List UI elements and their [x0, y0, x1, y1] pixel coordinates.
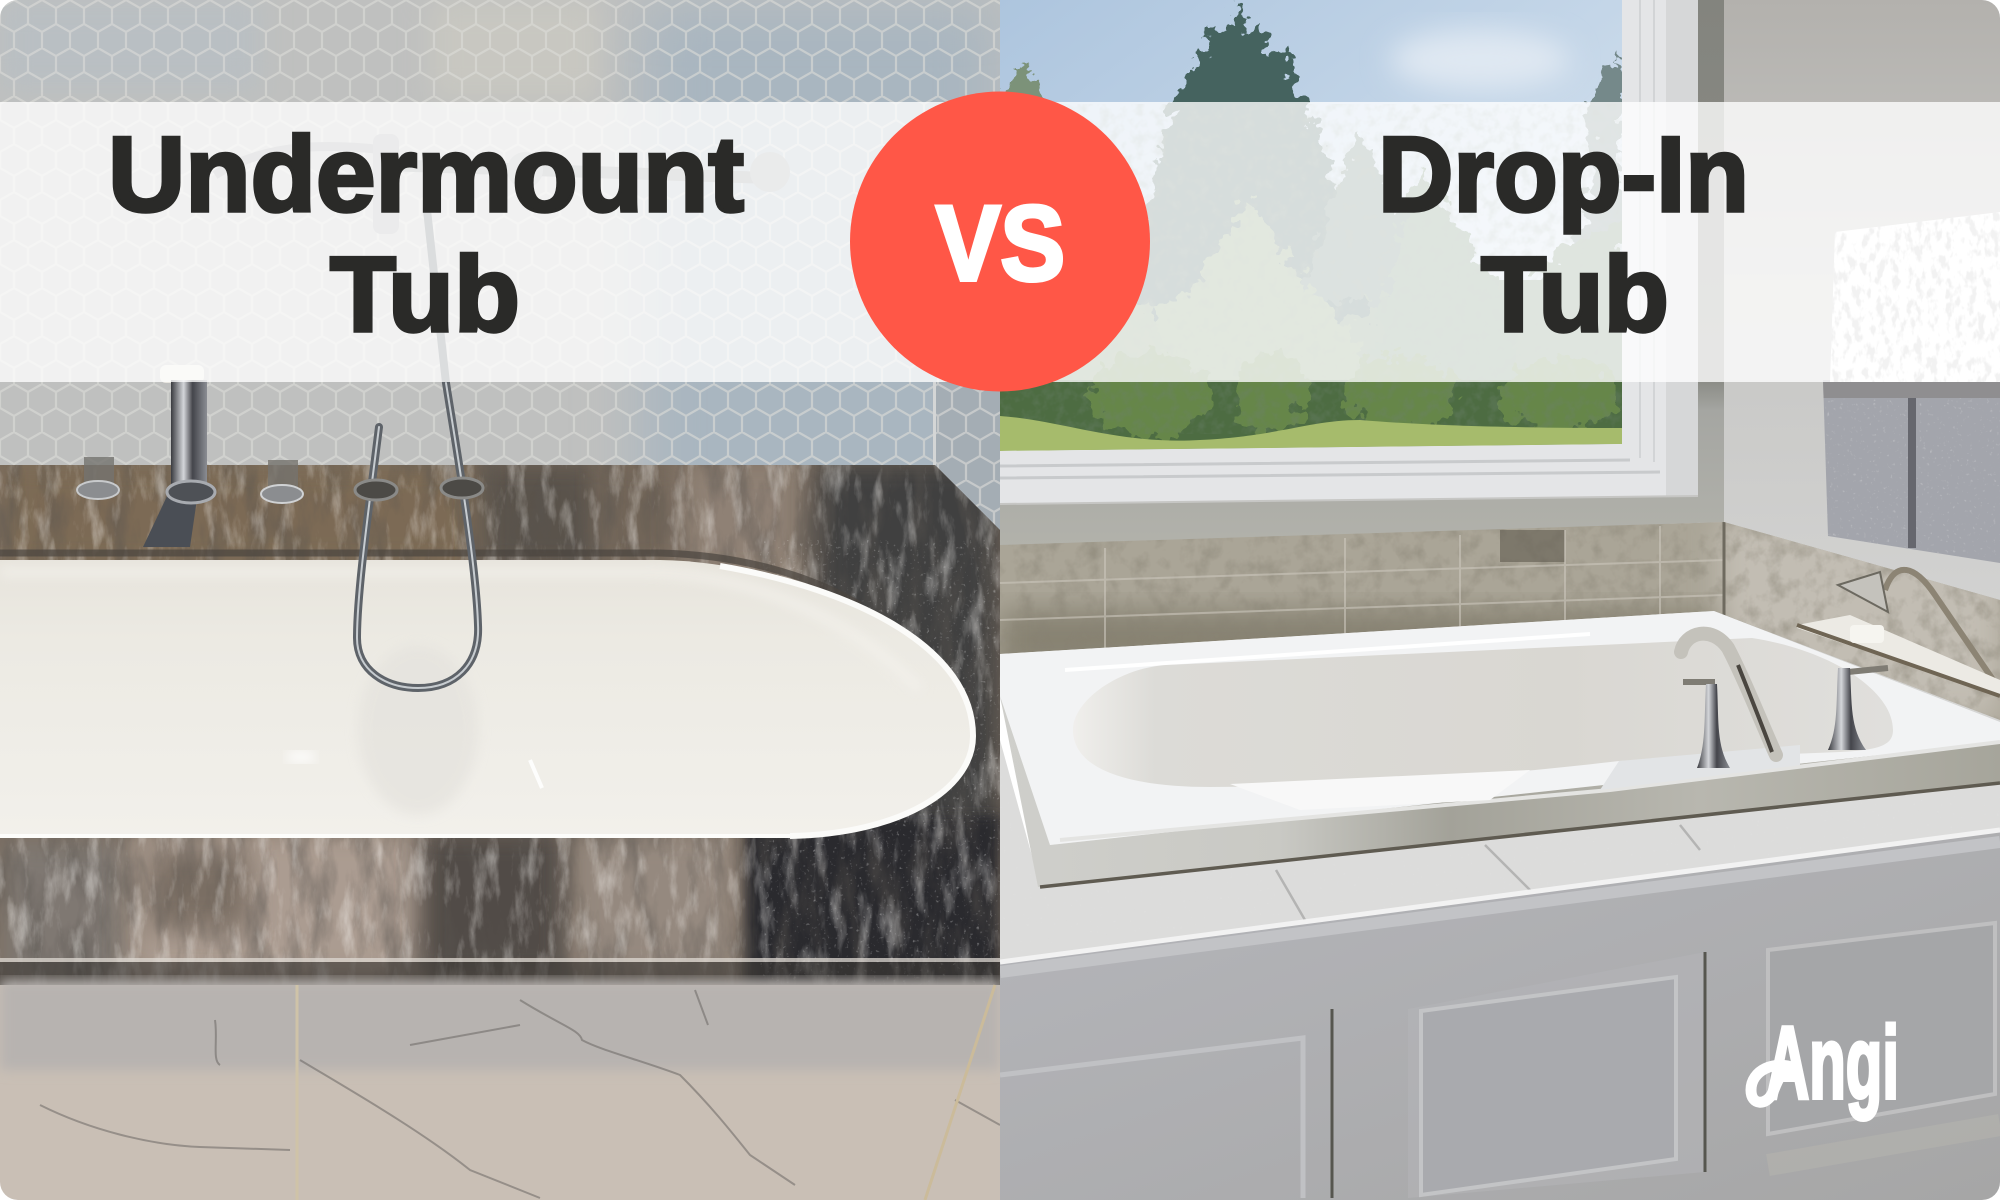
towel bar on wall — [215, 134, 790, 234]
stone tile backsplash — [1000, 510, 2000, 730]
faucet spout and valves — [77, 365, 483, 547]
translucent title band — [0, 102, 2000, 382]
heading: undermount tub — [112, 132, 744, 334]
shower head and arm — [1838, 570, 2000, 690]
marble countertop — [0, 460, 1000, 990]
tub basin — [1073, 638, 1893, 810]
panel: undermount tub photo — [0, 0, 1000, 1200]
deck tile joints — [1276, 825, 1700, 920]
wainscot panels below deck — [1000, 830, 2000, 1200]
heading: drop-in tub: Drop-In — [1378, 114, 1749, 234]
tub faucet and handles — [1681, 634, 1888, 768]
bath tray — [1797, 615, 2000, 696]
heading: drop-in tub: Tub — [1481, 234, 1669, 354]
grey window reveal and sill — [1000, 0, 1724, 548]
white undermount tub basin — [0, 553, 973, 838]
heading: undermount tub: Tub — [330, 234, 520, 354]
white window frame — [1000, 0, 1698, 505]
window view with sky, trees and lawn — [1000, 0, 1622, 452]
tile deck — [1000, 730, 2000, 970]
hand shower hose — [357, 210, 478, 688]
heading: drop-in tub — [1383, 136, 1744, 334]
hexagon tile wall — [0, 0, 1000, 560]
right wall — [1700, 0, 2000, 800]
Angi logo: Angi — [1766, 1005, 1899, 1120]
towels on the bar — [1820, 205, 2000, 568]
drop-in tub shell — [1000, 611, 2000, 887]
heading: undermount tub: Undermount — [108, 114, 744, 234]
VS badge — [850, 92, 1150, 392]
Angi logo — [1746, 1022, 1896, 1122]
lower marble wall — [0, 980, 1000, 1200]
VS badge: VS — [936, 183, 1065, 303]
panel: drop-in tub photo — [1000, 0, 2000, 1200]
